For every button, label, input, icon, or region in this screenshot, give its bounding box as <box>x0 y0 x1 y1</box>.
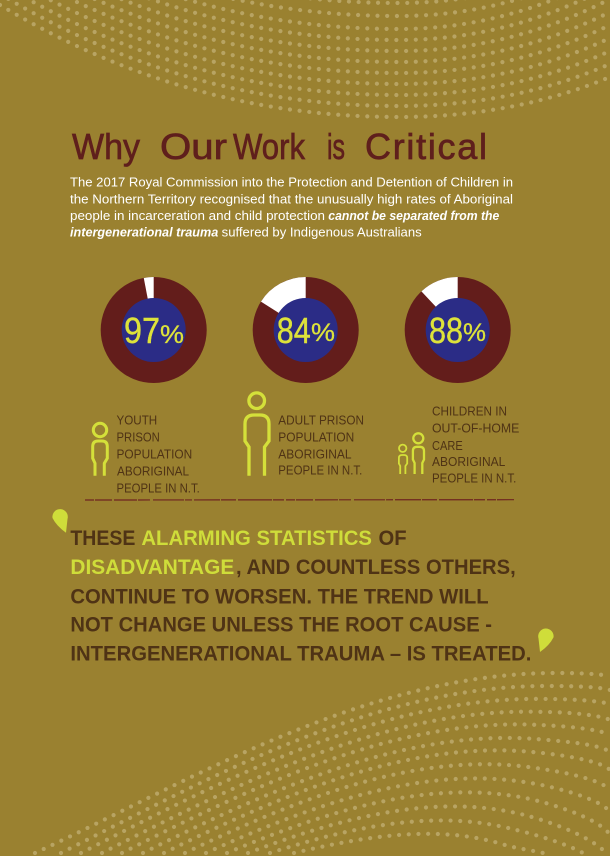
pull quote: DISADVANTAGE <box>70 555 234 579</box>
label: adult prison population: ADULT PRISON <box>278 412 364 427</box>
icon: youth person <box>93 423 107 476</box>
donut chart: 84% <box>253 277 359 383</box>
pull quote: OF <box>378 526 407 550</box>
donut chart: 88%: 88 <box>429 310 463 351</box>
title: Work <box>233 126 306 167</box>
label: children in out-of-home care: CARE <box>432 438 463 453</box>
label: children in out-of-home care: PEOPLE IN N.T. <box>432 471 516 486</box>
label: children in out-of-home care: ABORIGINAL <box>432 454 505 469</box>
donut chart: 88%: % <box>463 319 486 347</box>
title: is <box>327 126 345 167</box>
label: youth prison population: ABORIGINAL <box>117 464 189 478</box>
label: children in out-of-home care: CHILDREN IN <box>432 404 507 419</box>
icon: adult and child <box>399 433 424 474</box>
pull quote: NOT CHANGE UNLESS THE ROOT CAUSE - <box>70 613 492 637</box>
icon: opening quote mark <box>52 509 68 533</box>
intro paragraph: people in incarceration and child protection <box>70 208 325 223</box>
intro paragraph: intergenerational trauma <box>70 224 218 240</box>
intro paragraph: The 2017 Royal Commission into the Protection and Detention of Children in <box>70 174 513 190</box>
donut chart: 97% <box>101 277 207 383</box>
label: adult prison population: ABORIGINAL <box>278 446 352 461</box>
pull quote: , AND COUNTLESS OTHERS, <box>236 555 516 579</box>
label: adult prison population: PEOPLE IN N.T. <box>278 462 362 478</box>
label: youth prison population: POPULATION <box>116 446 192 461</box>
intro paragraph <box>70 174 513 240</box>
pull quote: ALARMING STATISTICS <box>141 526 372 550</box>
title: Why <box>72 126 140 167</box>
label: children in out-of-home care <box>432 404 520 486</box>
donut chart: 84%: % <box>311 319 335 347</box>
label: youth prison population: PRISON <box>116 430 160 444</box>
label: children in out-of-home care: OUT-OF-HOME <box>432 421 520 436</box>
dotted arcs: top background pattern <box>0 0 608 120</box>
pull quote: THESE <box>70 526 135 550</box>
label: youth prison population <box>116 412 200 495</box>
title <box>72 126 487 167</box>
pull quote: INTERGENERATIONAL TRAUMA – IS TREATED. <box>70 642 531 666</box>
title: Our <box>160 126 227 167</box>
intro paragraph: cannot be separated from the <box>328 208 499 223</box>
icon: closing quote mark <box>538 629 554 652</box>
intro paragraph: suffered by Indigenous Australians <box>222 224 422 240</box>
label: youth prison population: PEOPLE IN N.T. <box>116 480 200 495</box>
label: adult prison population <box>278 412 364 478</box>
label: adult prison population: POPULATION <box>278 430 354 444</box>
label: youth prison population: YOUTH <box>116 412 157 427</box>
donut chart: 97%: 97 <box>124 310 160 351</box>
donut chart: 84%: 84 <box>277 310 311 351</box>
pull quote: CONTINUE TO WORSEN. THE TREND WILL <box>70 584 489 608</box>
title: Critical <box>365 126 487 167</box>
dotted arcs: bottom background pattern <box>33 670 610 856</box>
donut chart: 97%: % <box>160 321 184 349</box>
intro paragraph: the Northern Territory recognised that the unusually high rates of Aboriginal <box>70 192 513 206</box>
pull quote <box>70 526 531 666</box>
icon: adult person <box>245 393 269 476</box>
donut chart: 88% <box>405 277 511 383</box>
